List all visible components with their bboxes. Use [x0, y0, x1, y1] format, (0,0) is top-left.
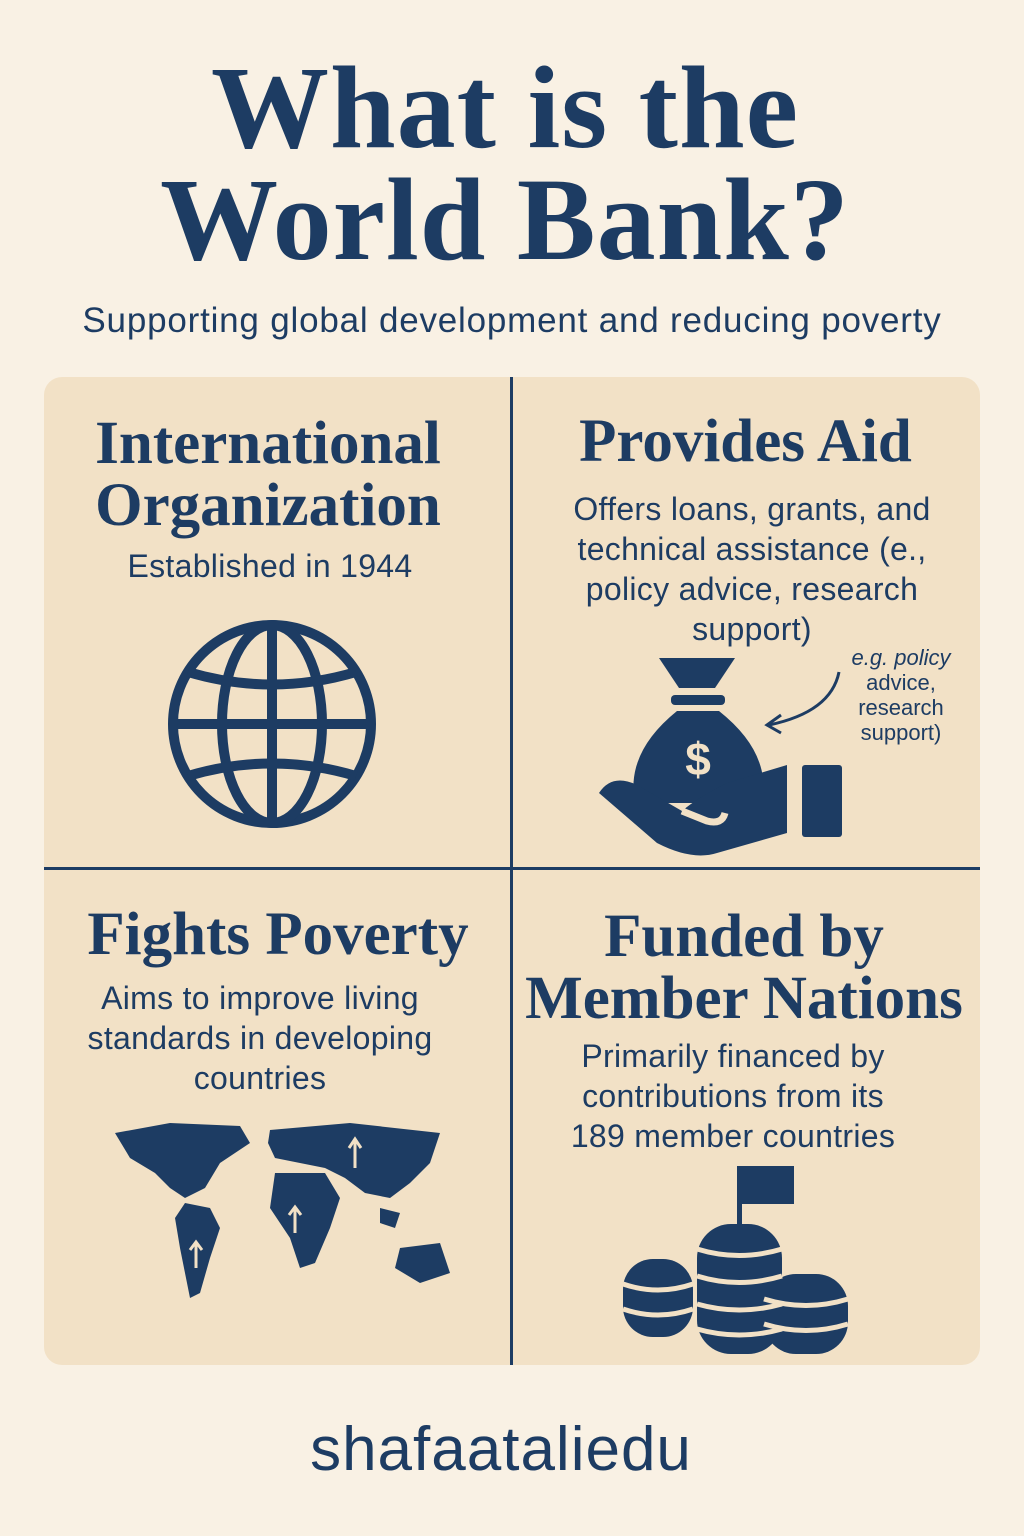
text: Offers loans, grants, and [573, 491, 931, 527]
arrow [764, 672, 840, 734]
title: What is the [211, 42, 799, 173]
heading: Provides Aid [579, 408, 912, 475]
text: countries [194, 1060, 326, 1096]
icon: coins with flag [623, 1166, 848, 1354]
callout [851, 645, 952, 745]
text [573, 491, 931, 647]
panel: provides aid [573, 408, 952, 856]
text: Established in 1944 [127, 548, 412, 584]
callout: e.g. policy [851, 645, 951, 670]
text: support) [692, 611, 812, 647]
heading [525, 903, 963, 1032]
text [571, 1038, 895, 1154]
panel: funded by member nations [525, 903, 963, 1354]
title [160, 42, 850, 285]
heading: International [95, 410, 441, 477]
text: standards in developing [88, 1020, 432, 1056]
icon: world map [115, 1123, 450, 1298]
text [88, 980, 432, 1096]
icon: money bag in hand: $ [685, 733, 711, 785]
title: World Bank? [160, 154, 850, 285]
heading: Member Nations [525, 965, 963, 1032]
text: Primarily financed by [581, 1038, 885, 1074]
panel: international organization [95, 410, 441, 828]
heading: Organization [95, 472, 441, 539]
subtitle: Supporting global development and reducing poverty [82, 301, 942, 340]
text: contributions from its [582, 1078, 884, 1114]
panel grid [44, 377, 980, 1365]
footer: shafaataliedu [310, 1415, 692, 1484]
callout: research [858, 695, 944, 720]
panel: fights poverty [87, 901, 469, 1298]
text: 189 member countries [571, 1118, 895, 1154]
text: Aims to improve living [101, 980, 419, 1016]
callout: advice, [866, 670, 936, 695]
icon: money bag in hand [599, 658, 842, 856]
icon: globe [168, 620, 376, 828]
callout: support) [861, 720, 941, 745]
heading: Fights Poverty [87, 901, 469, 968]
heading [95, 410, 441, 539]
heading: Funded by [604, 903, 884, 970]
text: policy advice, research [586, 571, 918, 607]
text: technical assistance (e., [578, 531, 926, 567]
